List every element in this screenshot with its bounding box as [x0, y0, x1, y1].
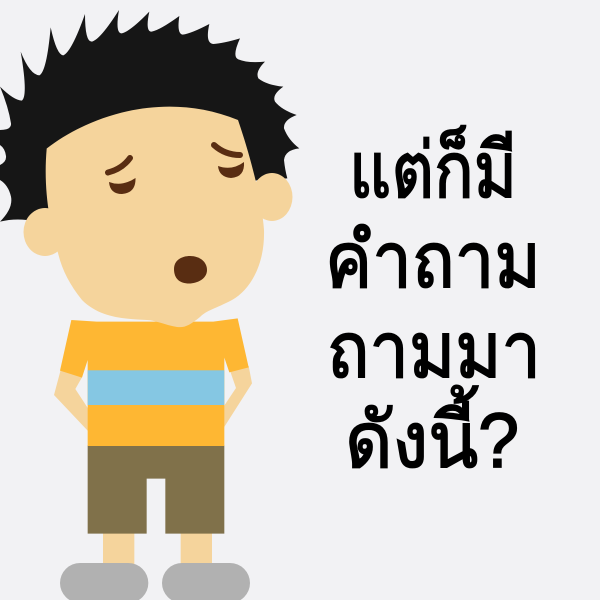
shoes [60, 563, 250, 600]
shirt stripe [88, 370, 224, 405]
right eyebrow [214, 145, 240, 155]
character [0, 10, 299, 600]
left eye [109, 178, 136, 194]
arms [54, 366, 252, 431]
legs [103, 530, 212, 567]
hair [0, 10, 299, 222]
right eye [218, 162, 244, 178]
left eyebrow [108, 158, 130, 172]
question text [325, 125, 541, 484]
face [46, 107, 264, 327]
line 3: ถามมา [327, 308, 541, 394]
ears [24, 173, 292, 256]
line 4: ดังนี้? [345, 385, 519, 484]
mouth [174, 256, 207, 284]
shirt [60, 318, 249, 446]
line 1: แต่ก็มี [349, 125, 517, 214]
line 2: คำถาม [325, 218, 541, 304]
shorts [88, 445, 224, 534]
